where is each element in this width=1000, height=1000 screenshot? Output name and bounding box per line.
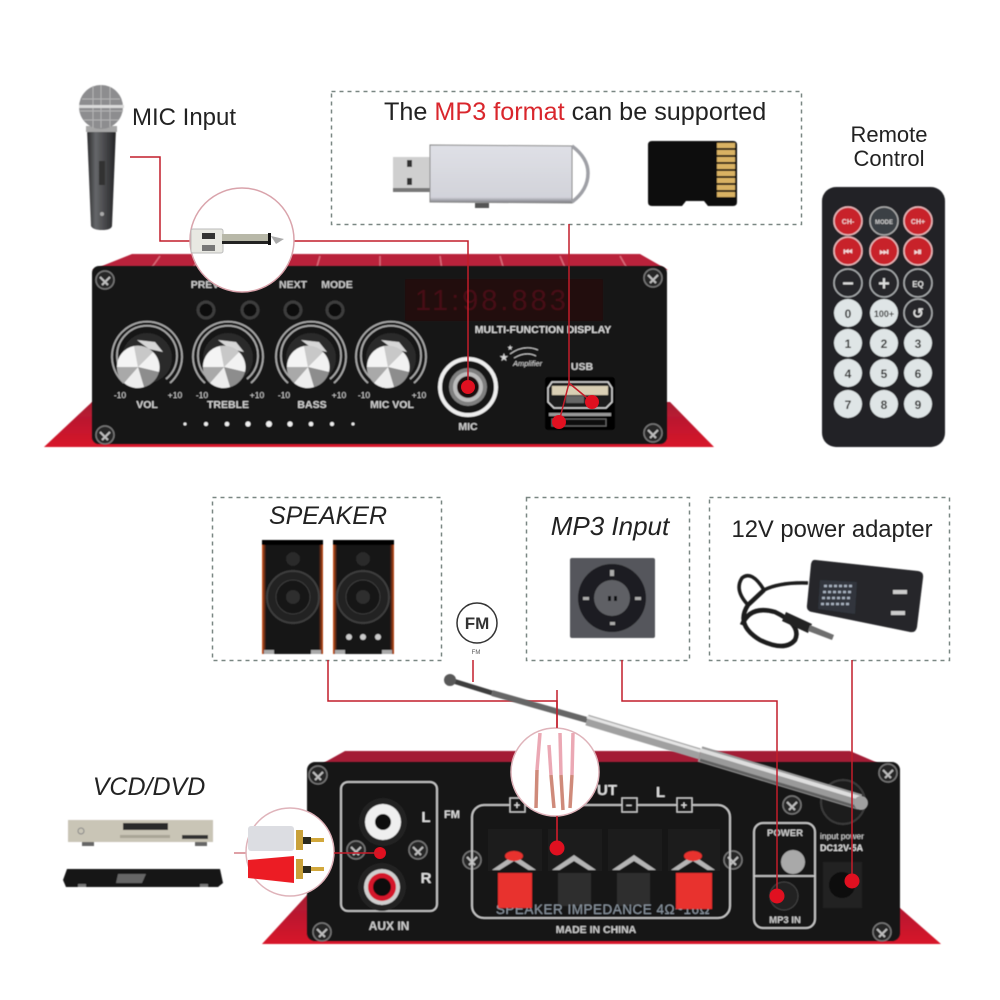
AUX input group bbox=[341, 782, 460, 933]
DC input bbox=[820, 831, 864, 908]
panel: speaker bbox=[212, 498, 442, 660]
amplifier front panel bbox=[92, 266, 667, 444]
icon: remote control: 2 bbox=[881, 337, 888, 351]
speaker terminals group: L bbox=[656, 784, 665, 801]
red dot: MP3 in bbox=[770, 888, 784, 904]
connector line: FM bbox=[472, 660, 474, 682]
button labels: MODE bbox=[321, 279, 353, 291]
antenna bbox=[444, 674, 868, 810]
icon: power adapter bbox=[739, 560, 923, 646]
icon: remote control: ↺ bbox=[912, 305, 924, 321]
connector line: DVD to plugs bbox=[234, 852, 247, 854]
icon: remote control: ⏯ bbox=[914, 247, 922, 258]
icon: remote control: 1 bbox=[845, 337, 852, 351]
icon: remote control: EQ bbox=[912, 280, 924, 289]
knob labels: -10 bbox=[114, 390, 126, 400]
heading: speaker: SPEAKER bbox=[269, 502, 387, 530]
knob labels: -10 bbox=[358, 390, 370, 400]
label: MIC Input: MIC Input bbox=[132, 104, 236, 131]
icon: speakers bbox=[262, 540, 394, 654]
DC input: input power bbox=[820, 831, 864, 841]
icon: remote control: CH- bbox=[842, 219, 855, 226]
icon: remote control: 100+ bbox=[874, 309, 894, 319]
speaker terminals group: + bbox=[681, 800, 687, 812]
knob labels: +10 bbox=[332, 390, 346, 400]
connector line: speaker lower bbox=[556, 690, 558, 848]
icon: FM badge bbox=[457, 603, 497, 656]
icon: remote control: − bbox=[842, 273, 854, 295]
icon: remote control: 8 bbox=[881, 398, 888, 412]
knobs bbox=[112, 322, 426, 388]
rear panel bbox=[307, 762, 900, 941]
speaker terminals group: MADE IN CHINA bbox=[556, 924, 637, 936]
icon: USB stick bbox=[393, 145, 588, 208]
panel: MP3 format box bbox=[332, 92, 802, 224]
connector line: AUX bbox=[334, 852, 380, 854]
knob labels: TREBLE bbox=[207, 399, 249, 411]
logo: amplifier: Amplifier bbox=[512, 359, 543, 368]
AUX input group: FM bbox=[444, 809, 460, 821]
icon: microphone bbox=[79, 85, 124, 230]
icon: MP3 player bbox=[570, 558, 655, 638]
label: Remote Control: Control bbox=[854, 146, 924, 171]
amplifier top and flanges bbox=[44, 254, 714, 447]
AUX input group: L bbox=[421, 809, 431, 826]
logo: amplifier: ★ bbox=[507, 344, 513, 352]
amplifier front panel: 11:98.883 bbox=[415, 285, 569, 317]
amplifier: rear view bbox=[262, 751, 941, 944]
button labels: PREV bbox=[191, 279, 219, 291]
speaker terminals group: SPEAKER IMPEDANCE 4Ω~16Ω bbox=[496, 902, 710, 917]
icon: DVD players bbox=[63, 820, 223, 887]
knob labels: +10 bbox=[168, 390, 182, 400]
logo: amplifier: ★ bbox=[499, 352, 509, 364]
heading: MP3 input: MP3 Input bbox=[551, 511, 671, 541]
icon: remote control: 3 bbox=[915, 337, 922, 351]
speaker terminals group: + bbox=[514, 800, 520, 812]
AUX input group: R bbox=[421, 870, 432, 887]
icon: remote control: + bbox=[878, 273, 890, 295]
label: Remote Control: Remote bbox=[850, 122, 928, 147]
knob labels: +10 bbox=[250, 390, 264, 400]
panel: power adapter bbox=[710, 498, 950, 660]
AUX input group: AUX IN bbox=[369, 919, 409, 933]
knob labels: BASS bbox=[297, 399, 327, 411]
connector line: MP3 bbox=[622, 660, 777, 896]
icon: memory card bbox=[648, 141, 737, 206]
rear top and flanges bbox=[262, 751, 941, 944]
icon: FM badge: FM bbox=[472, 650, 480, 656]
label: VCD/DVD: VCD/DVD bbox=[93, 773, 205, 801]
speaker terminals group: UT bbox=[597, 782, 617, 799]
knob labels: USB bbox=[571, 361, 594, 373]
icon: remote control: 9 bbox=[915, 398, 922, 412]
knob labels: -10 bbox=[196, 390, 208, 400]
icon: FM badge: FM bbox=[465, 614, 489, 633]
power and MP3 in group bbox=[754, 823, 815, 928]
power and MP3 in group: POWER bbox=[767, 828, 803, 839]
DC input: DC12V-5A bbox=[820, 843, 864, 853]
magnifier: mic plug bbox=[190, 188, 294, 292]
USB and card ports bbox=[545, 377, 615, 430]
icon: remote control: ⏭ bbox=[880, 247, 888, 258]
amplifier: front view bbox=[44, 254, 714, 447]
screws bbox=[96, 269, 662, 444]
icon: remote control: 4 bbox=[845, 367, 852, 381]
icon: remote control bbox=[822, 187, 945, 447]
knob labels: -10 bbox=[278, 390, 290, 400]
knob labels: MIC bbox=[458, 421, 478, 433]
connector line: USB bbox=[559, 224, 592, 422]
knob labels: MIC VOL bbox=[370, 399, 414, 411]
connector line: power bbox=[851, 660, 853, 881]
red dot: speaker bbox=[550, 840, 564, 856]
knob labels: +10 bbox=[412, 390, 426, 400]
power and MP3 in group: MP3 IN bbox=[769, 915, 801, 926]
icon: remote control: 5 bbox=[881, 367, 888, 381]
panel: MP3 input bbox=[526, 498, 690, 660]
icon: remote control: ⏮ bbox=[844, 247, 852, 258]
level LEDs bbox=[184, 421, 354, 427]
knob labels: VOL bbox=[136, 399, 158, 411]
button labels: NEXT bbox=[279, 279, 308, 291]
icon: remote control: 0 bbox=[845, 307, 852, 321]
heading: power adapter: 12V power adapter bbox=[731, 516, 933, 543]
MIC jack bbox=[440, 359, 496, 415]
red dot: MIC bbox=[461, 380, 475, 394]
label: display: MULTI-FUNCTION DISPLAY bbox=[475, 324, 611, 336]
red dot: USB bbox=[585, 395, 599, 409]
icon: remote control: 6 bbox=[915, 367, 922, 381]
red dot: card slot bbox=[552, 415, 566, 429]
icon: remote control: CH+ bbox=[911, 219, 925, 226]
antenna base nut bbox=[821, 780, 865, 824]
icon: remote control: MODE bbox=[875, 220, 893, 226]
logo: amplifier bbox=[499, 344, 543, 368]
heading: MP3 format: The MP3 format can be supported bbox=[384, 98, 766, 126]
knob labels bbox=[114, 361, 594, 433]
red dot: AUX bbox=[374, 847, 386, 859]
magnifier: RCA plugs bbox=[246, 808, 334, 896]
speaker terminals group: − bbox=[626, 800, 632, 812]
LED display bbox=[405, 279, 603, 321]
rear screws bbox=[309, 764, 897, 941]
connector line: speaker bbox=[328, 660, 557, 848]
speaker terminals group bbox=[472, 782, 730, 936]
icon: remote control: 7 bbox=[845, 398, 852, 412]
connector line: MIC bbox=[130, 157, 468, 387]
buttons bbox=[198, 302, 343, 318]
button labels bbox=[191, 279, 353, 291]
red dot: DC in bbox=[844, 874, 860, 888]
magnifier: speaker wires bbox=[511, 728, 599, 816]
